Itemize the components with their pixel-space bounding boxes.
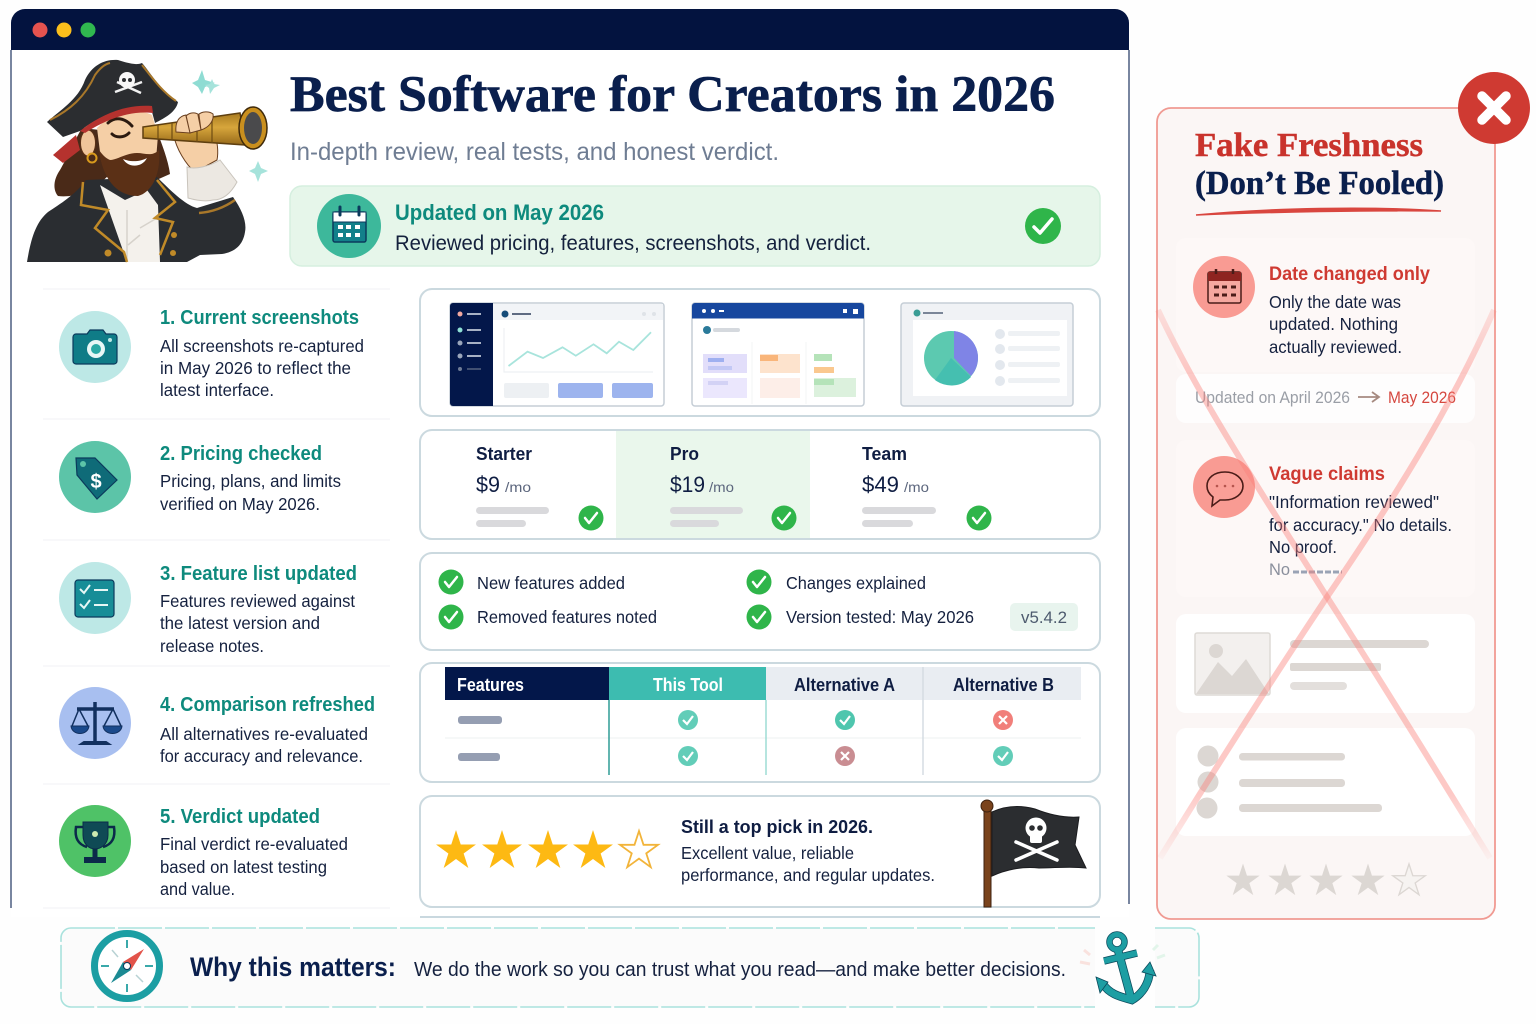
list item 1: current screenshots: latest interface. [160,380,274,400]
grey star rating [1226,864,1425,895]
version badge: v5.4.2 [1021,608,1067,627]
card: date changed only: updated. Nothing [1269,314,1398,334]
list item 4: comparison refreshed: All alternatives re-evaluated [160,724,368,744]
red cross-out [1158,310,1494,858]
version badge [1010,603,1078,631]
card: vague claims: Vague claims [1269,463,1385,485]
panel: feature changes [420,553,1100,650]
panel: updated banner: Updated on May 2026 [395,200,604,225]
plan: pro: Pro [670,444,699,464]
card: vague claims [1176,440,1475,597]
panel: pricing [420,430,1100,539]
plan: pro: /mo [709,479,734,495]
plan: starter [476,444,604,530]
list item 2: pricing checked [59,441,341,514]
list item 3: feature list updated: release notes. [160,636,264,656]
screenshot: pie chart [901,303,1073,406]
panel: screenshots [420,289,1100,416]
list item 3: feature list updated: 3. Feature list updated [160,563,357,585]
panel: comparison table: Alternative B [953,675,1054,695]
panel: verdict [420,796,1100,907]
panel: feature changes: Version tested: May 2026 [786,607,974,627]
list item 5: verdict updated: based on latest testing [160,857,327,877]
heading: Fake Freshness [1195,127,1423,164]
list item 1: current screenshots [59,307,364,400]
plan: pro [670,444,796,530]
card: date changed only: Updated on April 2026 [1195,389,1350,407]
list item 5: verdict updated [59,805,348,899]
icon: checklist [75,580,114,617]
icon: scales [71,702,122,744]
callout: why this matters: We do the work so you can trust what you read—and make better decisions. [414,958,1066,981]
panel: feature changes: Changes explained [786,573,926,593]
panel: comparison table [420,663,1100,782]
panel: feature changes: Removed features noted [477,607,657,627]
panel: updated banner [290,186,1100,266]
subtitle: In-depth review, real tests, and honest verdict. [290,138,779,166]
list item 5: verdict updated: 5. Verdict updated [160,806,320,828]
plan: team: Team [862,444,907,464]
list item 1: current screenshots: All screenshots re-captured [160,336,364,356]
icon: trophy [76,822,114,863]
icon: anchor [1080,922,1165,1012]
panel: verdict: Still a top pick in 2026. [681,816,873,837]
icon: pirate flag [981,800,1086,907]
list item 5: verdict updated: Final verdict re-evaluated [160,834,348,854]
card: vague claims: No proof. [1269,537,1337,557]
icon: red x badge [1458,72,1530,144]
list item 5: verdict updated: and value. [160,879,235,899]
icon: red calendar [1208,269,1241,303]
list item 2: pricing checked: 2. Pricing checked [160,443,322,465]
callout: why this matters: Why this matters: [190,952,396,982]
icon: calendar [317,194,381,258]
card: date changed only: actually reviewed. [1269,337,1402,357]
card: date changed only: Date changed only [1269,263,1430,285]
plan: team [862,444,992,530]
card: date changed only [1176,238,1475,423]
panel: browser window [11,9,1129,917]
screenshot: dashboard [450,303,664,406]
panel: comparison table: Alternative A [794,675,895,695]
list item 3: feature list updated [59,562,357,656]
plan: starter: Starter [476,444,532,464]
panel: verdict: Excellent value, reliable [681,843,854,863]
list item 4: comparison refreshed: for accuracy and relevance. [160,746,363,766]
list item 2: pricing checked: Pricing, plans, and limits [160,471,341,491]
icon: check [1025,208,1061,244]
plan: starter: $9 [476,472,500,497]
card: image placeholder [1176,614,1475,713]
list item 3: feature list updated: Features reviewed against [160,591,355,611]
panel: fake freshness [1157,108,1495,919]
card: list placeholder [1176,728,1475,836]
plan: starter: /mo [505,479,531,495]
heading [1195,127,1444,215]
icon: price tag: $ [90,471,102,493]
icon: camera [73,330,117,364]
screenshot: kanban [692,303,864,406]
list item 1: current screenshots: in May 2026 to reflect the [160,358,351,378]
list item 4: comparison refreshed: 4. Comparison refreshed [160,694,375,716]
plan: team: /mo [904,479,929,495]
card: vague claims: No [1269,561,1290,579]
icon: compass [94,934,160,998]
card: vague claims: "Information reviewed" [1269,492,1439,512]
icon: speech bubble [1207,472,1243,506]
plan: pro: $19 [670,472,705,497]
panel: comparison table: This Tool [653,675,723,695]
panel: updated banner: Reviewed pricing, features, screenshots, and verdict. [395,231,871,255]
title: Best Software for Creators in 2026 [290,67,1055,123]
icon: pirate with spyglass [27,60,268,262]
plan: team: $49 [862,472,899,497]
callout: why this matters [61,928,1199,1007]
star rating [436,830,658,868]
list item 3: feature list updated: the latest version and [160,613,320,633]
card: date changed only: Only the date was [1269,292,1401,312]
list item 2: pricing checked: verified on May 2026. [160,494,320,514]
heading: (Don’t Be Fooled) [1195,165,1444,202]
card: date changed only: May 2026 [1388,389,1456,407]
panel: feature changes: New features added [477,573,625,593]
icon: price tag [76,458,117,499]
list item 1: current screenshots: 1. Current screenshots [160,307,359,329]
panel: comparison table: Features [457,675,524,695]
card: vague claims: for accuracy." No details. [1269,515,1452,535]
list item 4: comparison refreshed [59,687,375,766]
panel: verdict: performance, and regular updates. [681,865,935,885]
